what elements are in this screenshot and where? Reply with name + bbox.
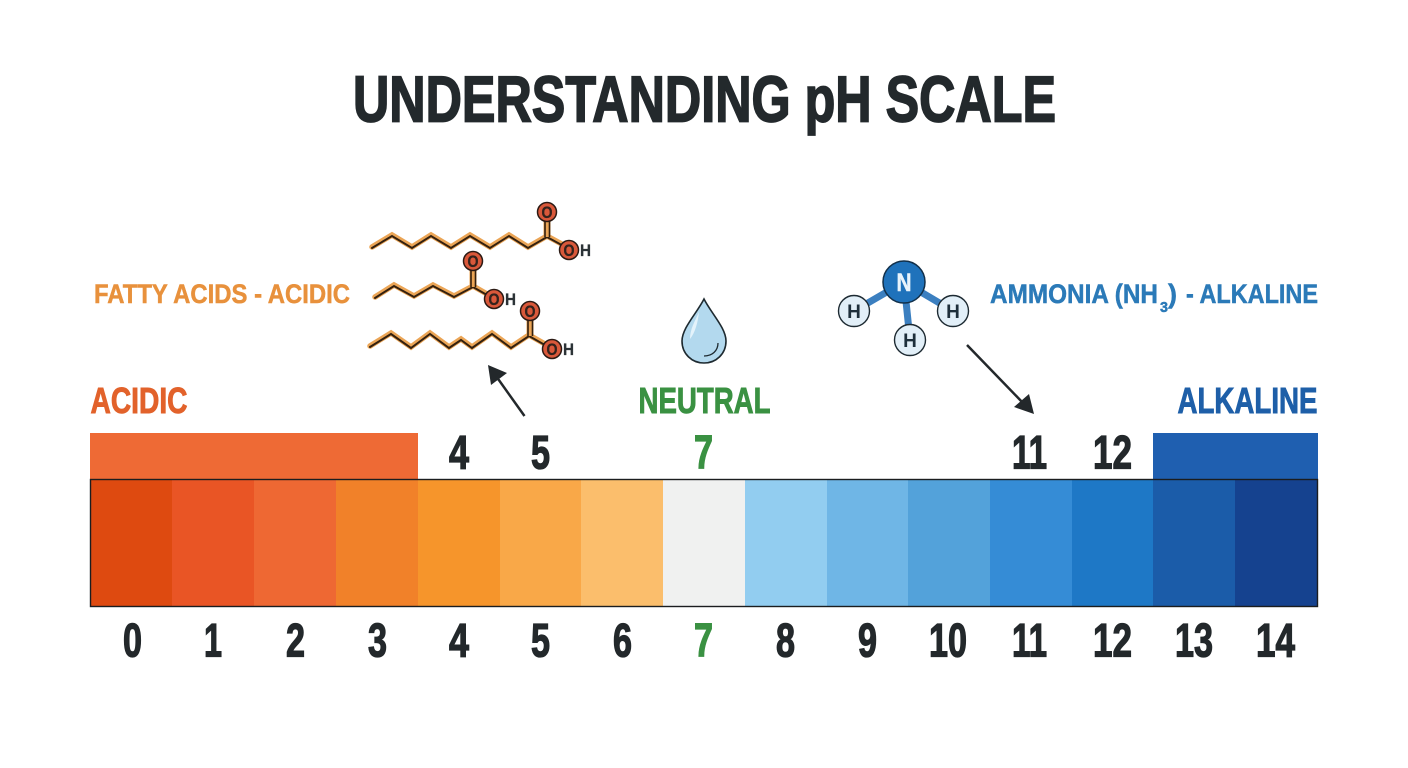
molecule: long chain 3: H	[563, 340, 574, 359]
title: UNDERSTANDING pH SCALE	[353, 62, 1056, 136]
lower number labels: 4	[449, 614, 469, 666]
lower number labels	[123, 614, 1295, 666]
molecule: long chain 1: O	[542, 203, 552, 222]
lower number labels: 10	[929, 614, 967, 666]
upper number labels	[449, 426, 1132, 478]
arrow: to pH 11	[967, 345, 1034, 414]
molecule: short chain 2	[375, 252, 516, 309]
molecule: long chain 3: O	[524, 302, 536, 321]
lower number labels: 13	[1175, 614, 1213, 666]
lower number labels: 7	[694, 614, 713, 666]
upper number labels: 11	[1012, 426, 1047, 478]
molecule: long chain 1: O	[564, 241, 574, 260]
label: fatty acids: FATTY ACIDS - ACIDIC	[94, 279, 350, 309]
upper number labels: 5	[531, 426, 550, 478]
icon: fatty acid molecules	[370, 202, 591, 359]
molecule: long chain 3: O	[546, 340, 558, 359]
molecule: short chain 2: O	[468, 252, 478, 271]
molecule: short chain 2: O	[488, 290, 500, 309]
molecule: long chain 1: H	[580, 241, 591, 260]
molecule: long chain 3	[370, 302, 574, 359]
lower number labels: 14	[1256, 614, 1295, 666]
icon: ammonia molecule	[838, 261, 968, 356]
lower number labels: 11	[1012, 614, 1047, 666]
label: ammonia	[990, 279, 1318, 316]
icon: ammonia molecule: H	[903, 331, 917, 352]
icon: water drop	[682, 299, 726, 363]
molecule: long chain 1	[372, 202, 591, 260]
lower number labels: 5	[531, 614, 550, 666]
lower number labels: 8	[776, 614, 795, 666]
lower number labels: 9	[858, 614, 877, 666]
lower number labels: 12	[1093, 614, 1132, 666]
heading: acidic: ACIDIC	[90, 380, 188, 421]
acidic range bar	[90, 433, 418, 479]
lower number labels: 6	[613, 614, 632, 666]
upper number labels: 12	[1093, 426, 1132, 478]
lower number labels: 3	[368, 614, 387, 666]
upper number labels: 4	[449, 426, 469, 478]
icon: ammonia molecule: H	[946, 302, 960, 323]
label: ammonia: 3	[1160, 299, 1168, 316]
heading: alkaline: ALKALINE	[1178, 380, 1318, 421]
upper number labels: 7	[694, 426, 713, 478]
heading: neutral: NEUTRAL	[638, 380, 770, 421]
alkaline range bar	[1153, 433, 1318, 479]
label: ammonia: )	[1168, 279, 1177, 309]
icon: ammonia molecule: N	[896, 269, 912, 297]
molecule: short chain 2: H	[505, 290, 516, 309]
arrow: to pH 5	[488, 365, 524, 416]
lower number labels: 0	[123, 614, 142, 666]
icon: ammonia molecule: H	[847, 302, 861, 323]
lower number labels: 2	[286, 614, 305, 666]
lower number labels: 1	[204, 614, 222, 666]
label: ammonia: AMMONIA (NH	[990, 279, 1158, 309]
pH scale bar	[90, 479, 1318, 607]
label: ammonia: - ALKALINE	[1186, 279, 1318, 309]
